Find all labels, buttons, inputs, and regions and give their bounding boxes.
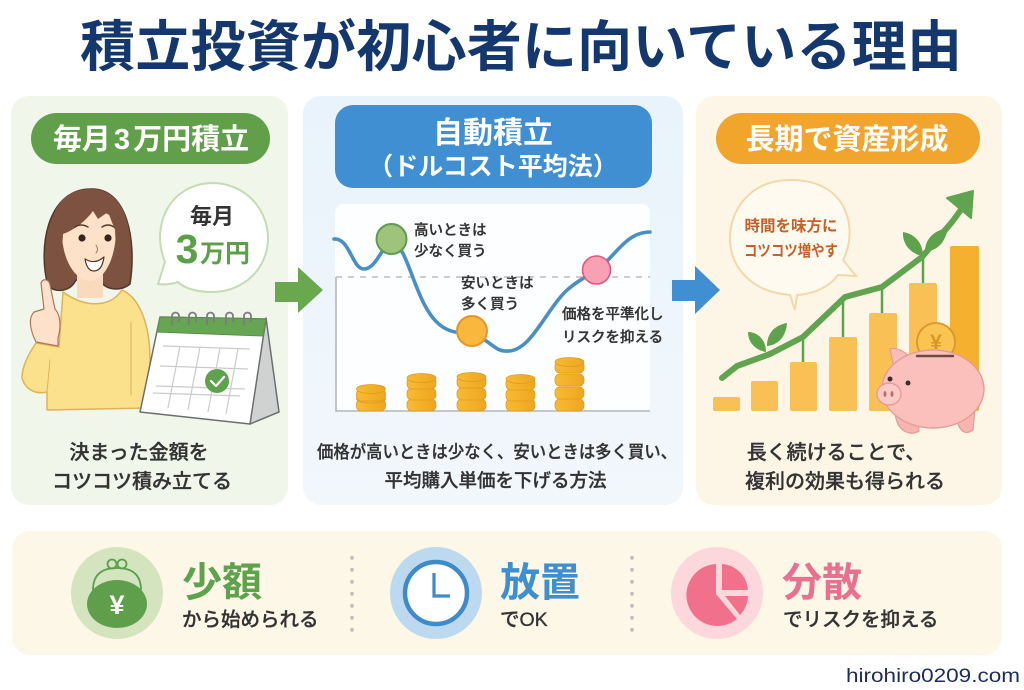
growth arrow with sprouts <box>722 191 973 378</box>
watermark: hirohiro0209.com <box>846 666 1020 687</box>
heading pill: long-term asset building: 長期で資産形成 <box>745 123 949 156</box>
caption: panel 2 <box>317 442 677 491</box>
panel: dollar-cost averaging <box>303 96 683 505</box>
marker: high price <box>376 224 406 254</box>
heading pill: automatic saving: 自動積立 <box>433 117 553 150</box>
benefit: diversification: 分散 <box>782 561 862 605</box>
speech bubble: 3万円: 3 <box>176 226 198 272</box>
caption: panel 2: 価格が高いときは少なく、安いときは多く買い、 <box>317 442 677 462</box>
icon: pie chart <box>671 547 763 639</box>
caption: panel 3: 複利の効果も得られる <box>745 470 945 493</box>
speech bubble: time is on your side <box>730 180 856 310</box>
panel: long-term growth <box>696 96 1002 505</box>
speech bubble: 3万円: 万円 <box>200 240 250 268</box>
chart: price curve with coin stacks <box>334 204 664 412</box>
arrow: green <box>275 267 323 313</box>
benefit: leave it alone: でOK <box>500 609 548 631</box>
benefit: diversification <box>671 547 938 639</box>
title: 積立投資が初心者に向いている理由 <box>80 16 962 78</box>
labels: chart annotations <box>414 222 664 346</box>
caption: panel 3 <box>745 441 945 493</box>
speech bubble: time is on your side: コツコツ増やす <box>744 241 838 260</box>
labels: chart annotations: 高いときは <box>414 222 486 239</box>
illustration: woman pointing <box>22 189 150 410</box>
benefit: leave it alone <box>390 547 580 639</box>
marker: average price <box>582 256 610 284</box>
labels: chart annotations: 多く買う <box>461 295 519 313</box>
labels: chart annotations: 価格を平準化し <box>562 306 664 323</box>
coin stacks <box>356 358 584 411</box>
chart: rising bars <box>713 246 979 411</box>
labels: chart annotations: リスクを抑える <box>562 329 663 346</box>
icon: desk calendar <box>140 313 279 424</box>
icon: coin purse <box>71 547 163 639</box>
panel: monthly 30,000 yen <box>11 96 288 505</box>
labels: chart annotations: 安いときは <box>461 275 534 292</box>
heading pill: automatic saving <box>335 105 652 188</box>
benefit: small amount: 少額 <box>182 561 262 605</box>
labels: chart annotations: 少なく買う <box>414 243 486 260</box>
caption: panel 2: 平均購入単価を下げる方法 <box>384 470 607 491</box>
heading pill: automatic saving: （ドルコスト平均法） <box>368 153 618 181</box>
benefit: small amount: から始められる <box>182 609 319 631</box>
dotted divider <box>630 556 634 632</box>
arrow: blue <box>672 266 720 314</box>
heading pill: long-term asset building <box>716 113 980 164</box>
caption: panel 1 <box>52 441 232 493</box>
benefit: small amount <box>71 547 319 639</box>
icon: clock <box>390 547 482 639</box>
heading pill: monthly saving: 毎月3万円積立 <box>53 123 249 156</box>
benefit: leave it alone: 放置 <box>500 561 580 605</box>
speech bubble: 3万円 <box>158 183 268 292</box>
caption: panel 1: コツコツ積み立てる <box>52 470 232 493</box>
dotted divider <box>350 556 354 632</box>
illustration: piggy bank with coin: ¥ <box>930 331 942 354</box>
benefit: diversification: でリスクを抑える <box>783 609 938 631</box>
illustration: piggy bank with coin <box>877 323 984 433</box>
speech bubble: time is on your side: 時間を味方に <box>744 216 838 235</box>
caption: panel 1: 決まった金額を <box>69 441 209 464</box>
heading pill: monthly saving <box>31 113 270 164</box>
panel: three benefits <box>12 531 1002 655</box>
caption: panel 3: 長く続けることで、 <box>747 441 925 464</box>
marker: low price <box>457 316 487 346</box>
icon: coin purse: ¥ <box>109 590 125 620</box>
speech bubble: 3万円: 毎月 <box>190 204 234 229</box>
